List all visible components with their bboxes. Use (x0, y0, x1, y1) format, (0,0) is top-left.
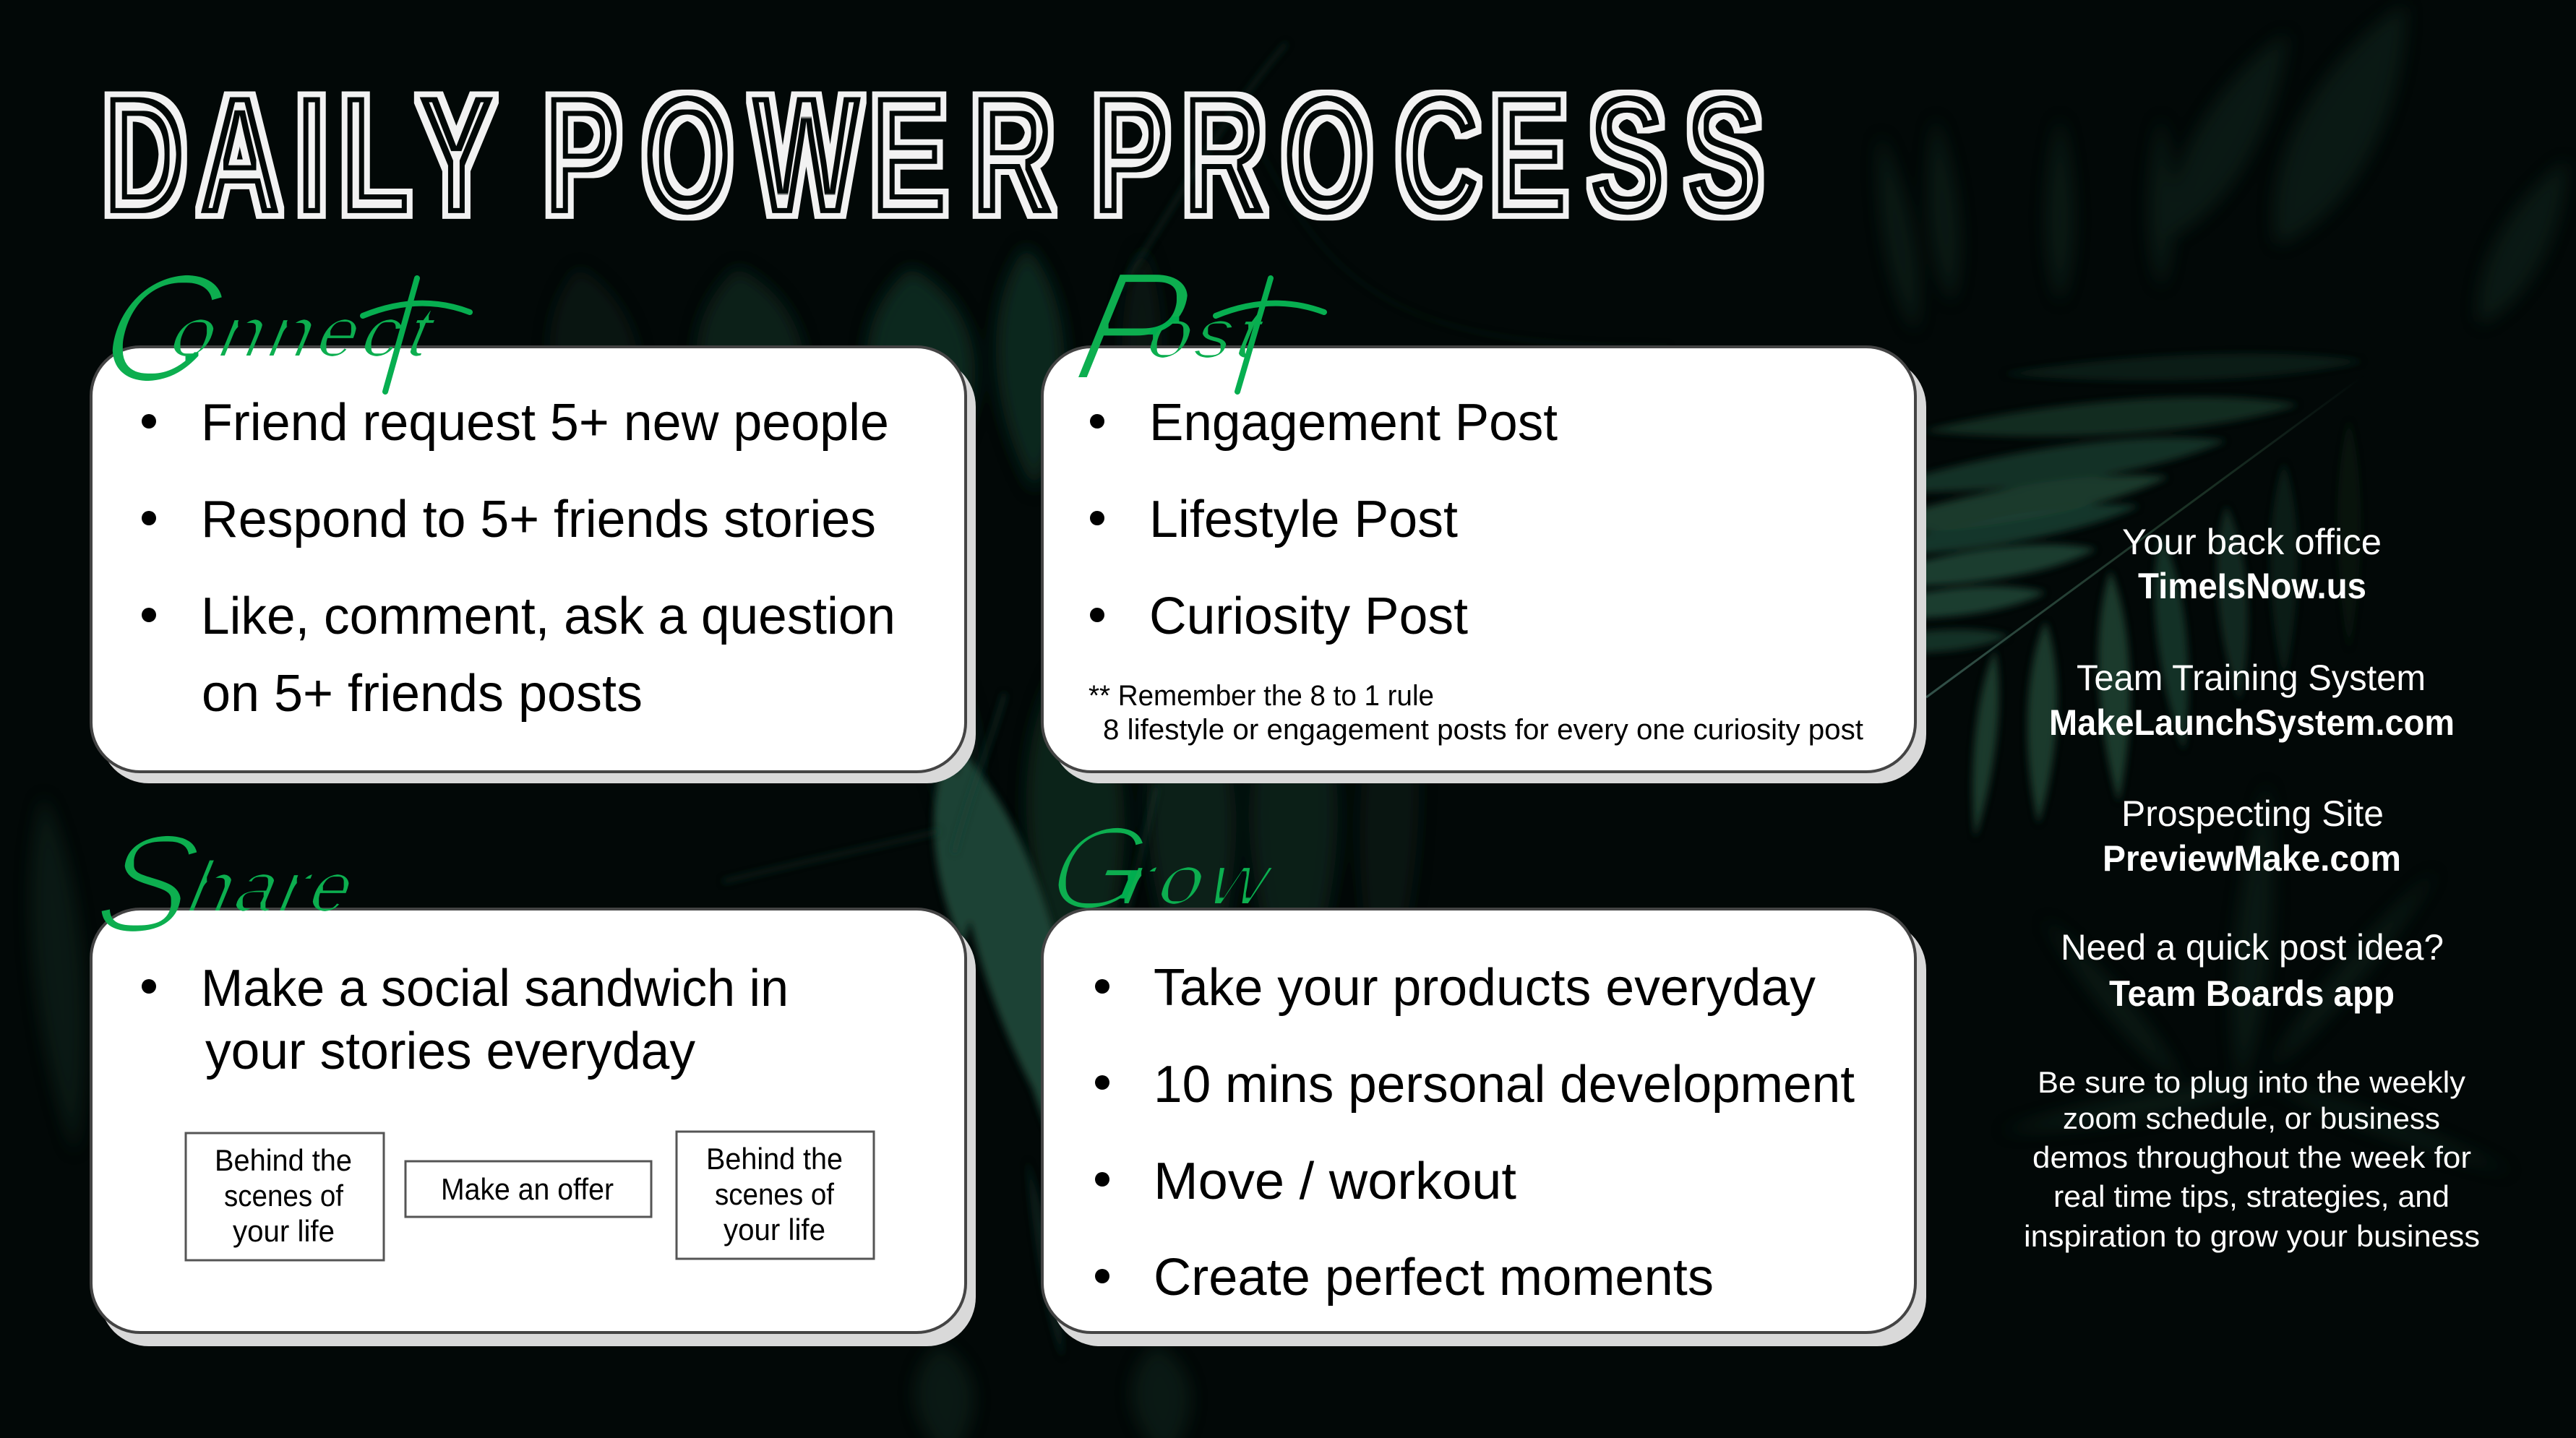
bullet list: Like, comment, ask a question (201, 587, 896, 645)
box: make an offer (405, 1161, 651, 1217)
closing paragraph: inspiration to grow your business (2024, 1219, 2480, 1253)
team training link: Team Training System (2077, 658, 2426, 698)
box: make an offer: Make an offer (441, 1172, 614, 1206)
bullet text: your stories everyday (205, 1022, 695, 1080)
script heading: Share: S (84, 804, 212, 963)
back office link: TimeIsNow.us (2138, 566, 2366, 606)
panel: grow (1039, 802, 1926, 1346)
bullet list: Create perfect moments (1154, 1249, 1714, 1306)
script heading: Share: hare (181, 845, 363, 929)
bullet list: Respond to 5+ friends stories (201, 491, 876, 548)
back office link: Your back office (2122, 522, 2382, 562)
panel: connect (87, 241, 976, 783)
box: behind the scenes right: Behind the (706, 1142, 843, 1176)
bullet text: Make a social sandwich in (201, 960, 789, 1017)
script heading: Post: P (1062, 239, 1203, 413)
card shadow (1051, 358, 1926, 783)
bullet list: Move / workout (1154, 1153, 1516, 1210)
panel: post (1042, 239, 1926, 783)
prospecting link: Prospecting Site (2121, 793, 2384, 834)
post idea link (2061, 927, 2444, 1014)
bullet list: Curiosity Post (1149, 587, 1468, 645)
card (1042, 347, 1915, 772)
note: 8 to 1 rule: 8 lifestyle or engagement posts for every one curiosity post (1103, 714, 1863, 746)
closing paragraph: zoom schedule, or business (2063, 1101, 2440, 1135)
title: DAILY POWER PROCESS (0, 61, 1763, 249)
script heading: Connect: onnect (163, 290, 445, 374)
bullet list: Lifestyle Post (1149, 491, 1458, 548)
card (1042, 909, 1915, 1332)
card shadow (1051, 921, 1926, 1346)
script heading: Post (1062, 239, 1324, 413)
box: behind the scenes left: scenes of (224, 1179, 343, 1213)
bullet text (142, 960, 789, 1080)
note: 8 to 1 rule (1089, 680, 1863, 746)
script heading: Share (84, 804, 372, 963)
script heading: Grow (1039, 802, 1292, 935)
bullet list (1095, 959, 1855, 1306)
panel: share (84, 804, 976, 1346)
bullet list (142, 394, 896, 723)
closing paragraph (2024, 1065, 2480, 1253)
sidebar: links and notes (2024, 522, 2480, 1253)
prospecting link: PreviewMake.com (2103, 838, 2401, 879)
bullet list: Take your products everyday (1154, 959, 1816, 1017)
note: 8 to 1 rule: ** Remember the 8 to 1 rule (1089, 680, 1434, 712)
post idea link: Need a quick post idea? (2061, 927, 2444, 968)
script heading: Connect: C (87, 241, 237, 415)
prospecting link (2103, 793, 2401, 879)
box: behind the scenes right: your life (724, 1213, 825, 1247)
closing paragraph: demos throughout the week for (2032, 1140, 2471, 1174)
bullet list: Friend request 5+ new people (201, 394, 889, 452)
script heading: Post: ost (1140, 292, 1273, 376)
bullet list: on 5+ friends posts (202, 665, 643, 723)
script heading: Grow: row (1116, 838, 1284, 922)
box: behind the scenes right (677, 1132, 874, 1259)
team training link: MakeLaunchSystem.com (2049, 702, 2455, 743)
box: behind the scenes left: your life (233, 1214, 335, 1248)
bullet list: Engagement Post (1149, 394, 1558, 452)
card (91, 909, 966, 1332)
card (91, 347, 966, 772)
bullet list (1090, 394, 1558, 645)
team training link (2049, 658, 2455, 743)
closing paragraph: Be sure to plug into the weekly (2038, 1065, 2465, 1099)
bullet list: 10 mins personal development (1154, 1056, 1855, 1114)
box: behind the scenes left: Behind the (215, 1143, 352, 1177)
back office link (2122, 522, 2382, 606)
box: behind the scenes right: scenes of (715, 1177, 834, 1211)
script heading: Grow: G (1039, 802, 1160, 935)
box: behind the scenes left (186, 1133, 384, 1260)
card shadow (100, 921, 976, 1346)
card shadow (100, 358, 976, 783)
script heading: Connect (87, 241, 470, 415)
closing paragraph: real time tips, strategies, and (2053, 1179, 2450, 1213)
post idea link: Team Boards app (2109, 973, 2395, 1014)
